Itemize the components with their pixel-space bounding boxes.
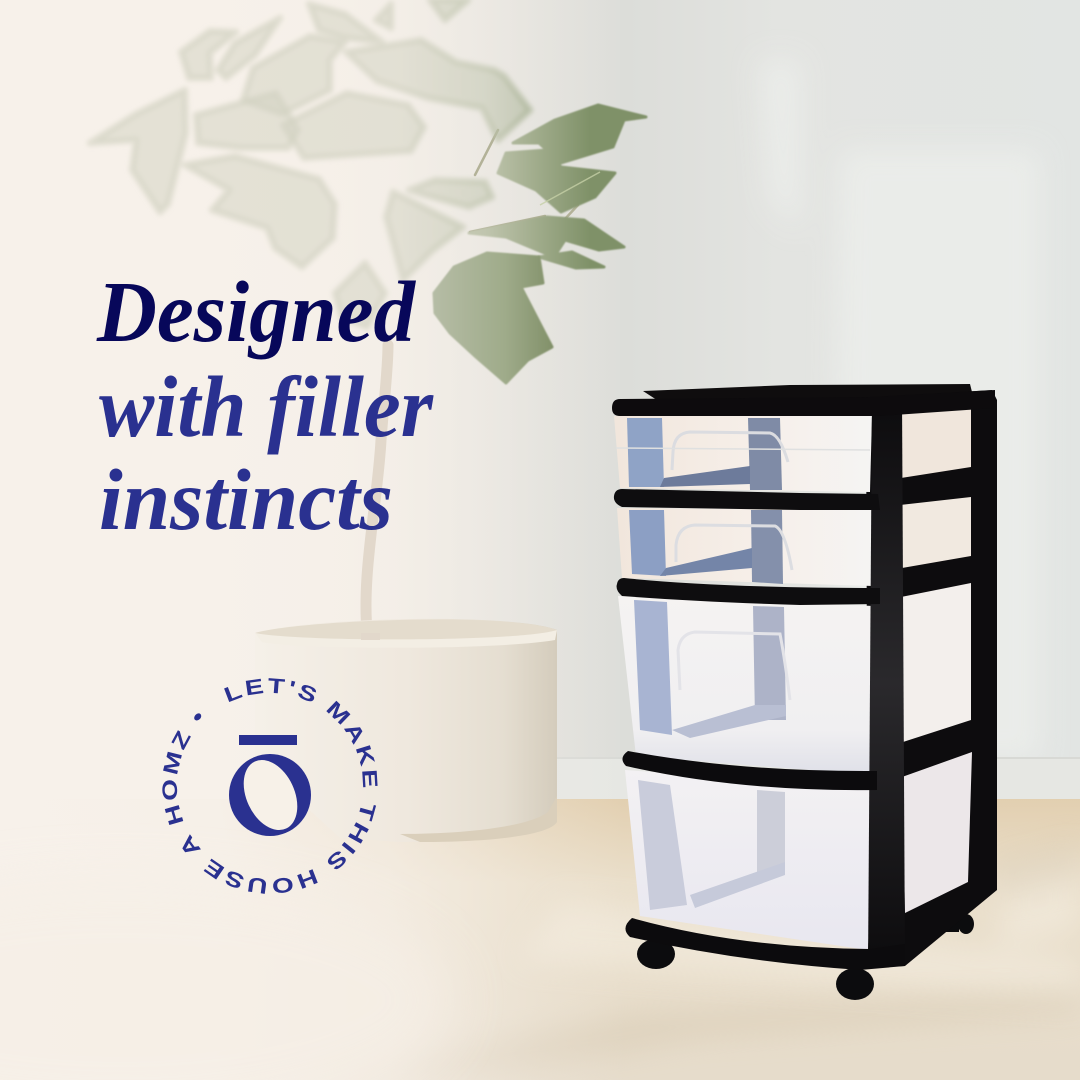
drawer 3 (618, 596, 874, 775)
cart side frame (866, 390, 997, 966)
vivid leaves (469, 105, 646, 268)
wooden floor (0, 799, 1080, 1080)
baseboard (557, 757, 1080, 799)
floor fade bottom left (0, 880, 450, 1080)
faint leaves (90, 0, 530, 327)
leaf veins (522, 172, 600, 350)
large low leaf (434, 253, 552, 383)
planter pot (255, 619, 557, 842)
wall light patch (760, 60, 1040, 760)
top rim (612, 390, 995, 416)
wall background (0, 0, 1080, 800)
logo O counter (233, 751, 308, 839)
drawer cart (612, 384, 997, 1000)
headline (96, 263, 434, 548)
plant stem (366, 130, 578, 640)
front post (868, 398, 905, 968)
cart lid (643, 384, 972, 402)
rim 2 (614, 489, 880, 510)
rim 3 (617, 578, 880, 605)
logo bar (239, 735, 297, 745)
drawer 1 (614, 416, 872, 492)
rim 4 (622, 751, 877, 790)
drawer 2 (617, 508, 875, 586)
side panes (899, 407, 972, 913)
plant foliage (90, 0, 646, 383)
cart wheels (637, 914, 974, 1000)
circular slogan: LET'S MAKE THIS HOUSE A HOMZ • (162, 678, 378, 894)
headline line 3: instincts (99, 451, 393, 548)
bottom rim (625, 918, 905, 970)
logo badge (162, 678, 378, 894)
headline line 1: Designed (96, 263, 416, 360)
drawer 4 (625, 770, 876, 950)
headline line 2: with filler (99, 358, 434, 455)
logo O (229, 754, 311, 836)
